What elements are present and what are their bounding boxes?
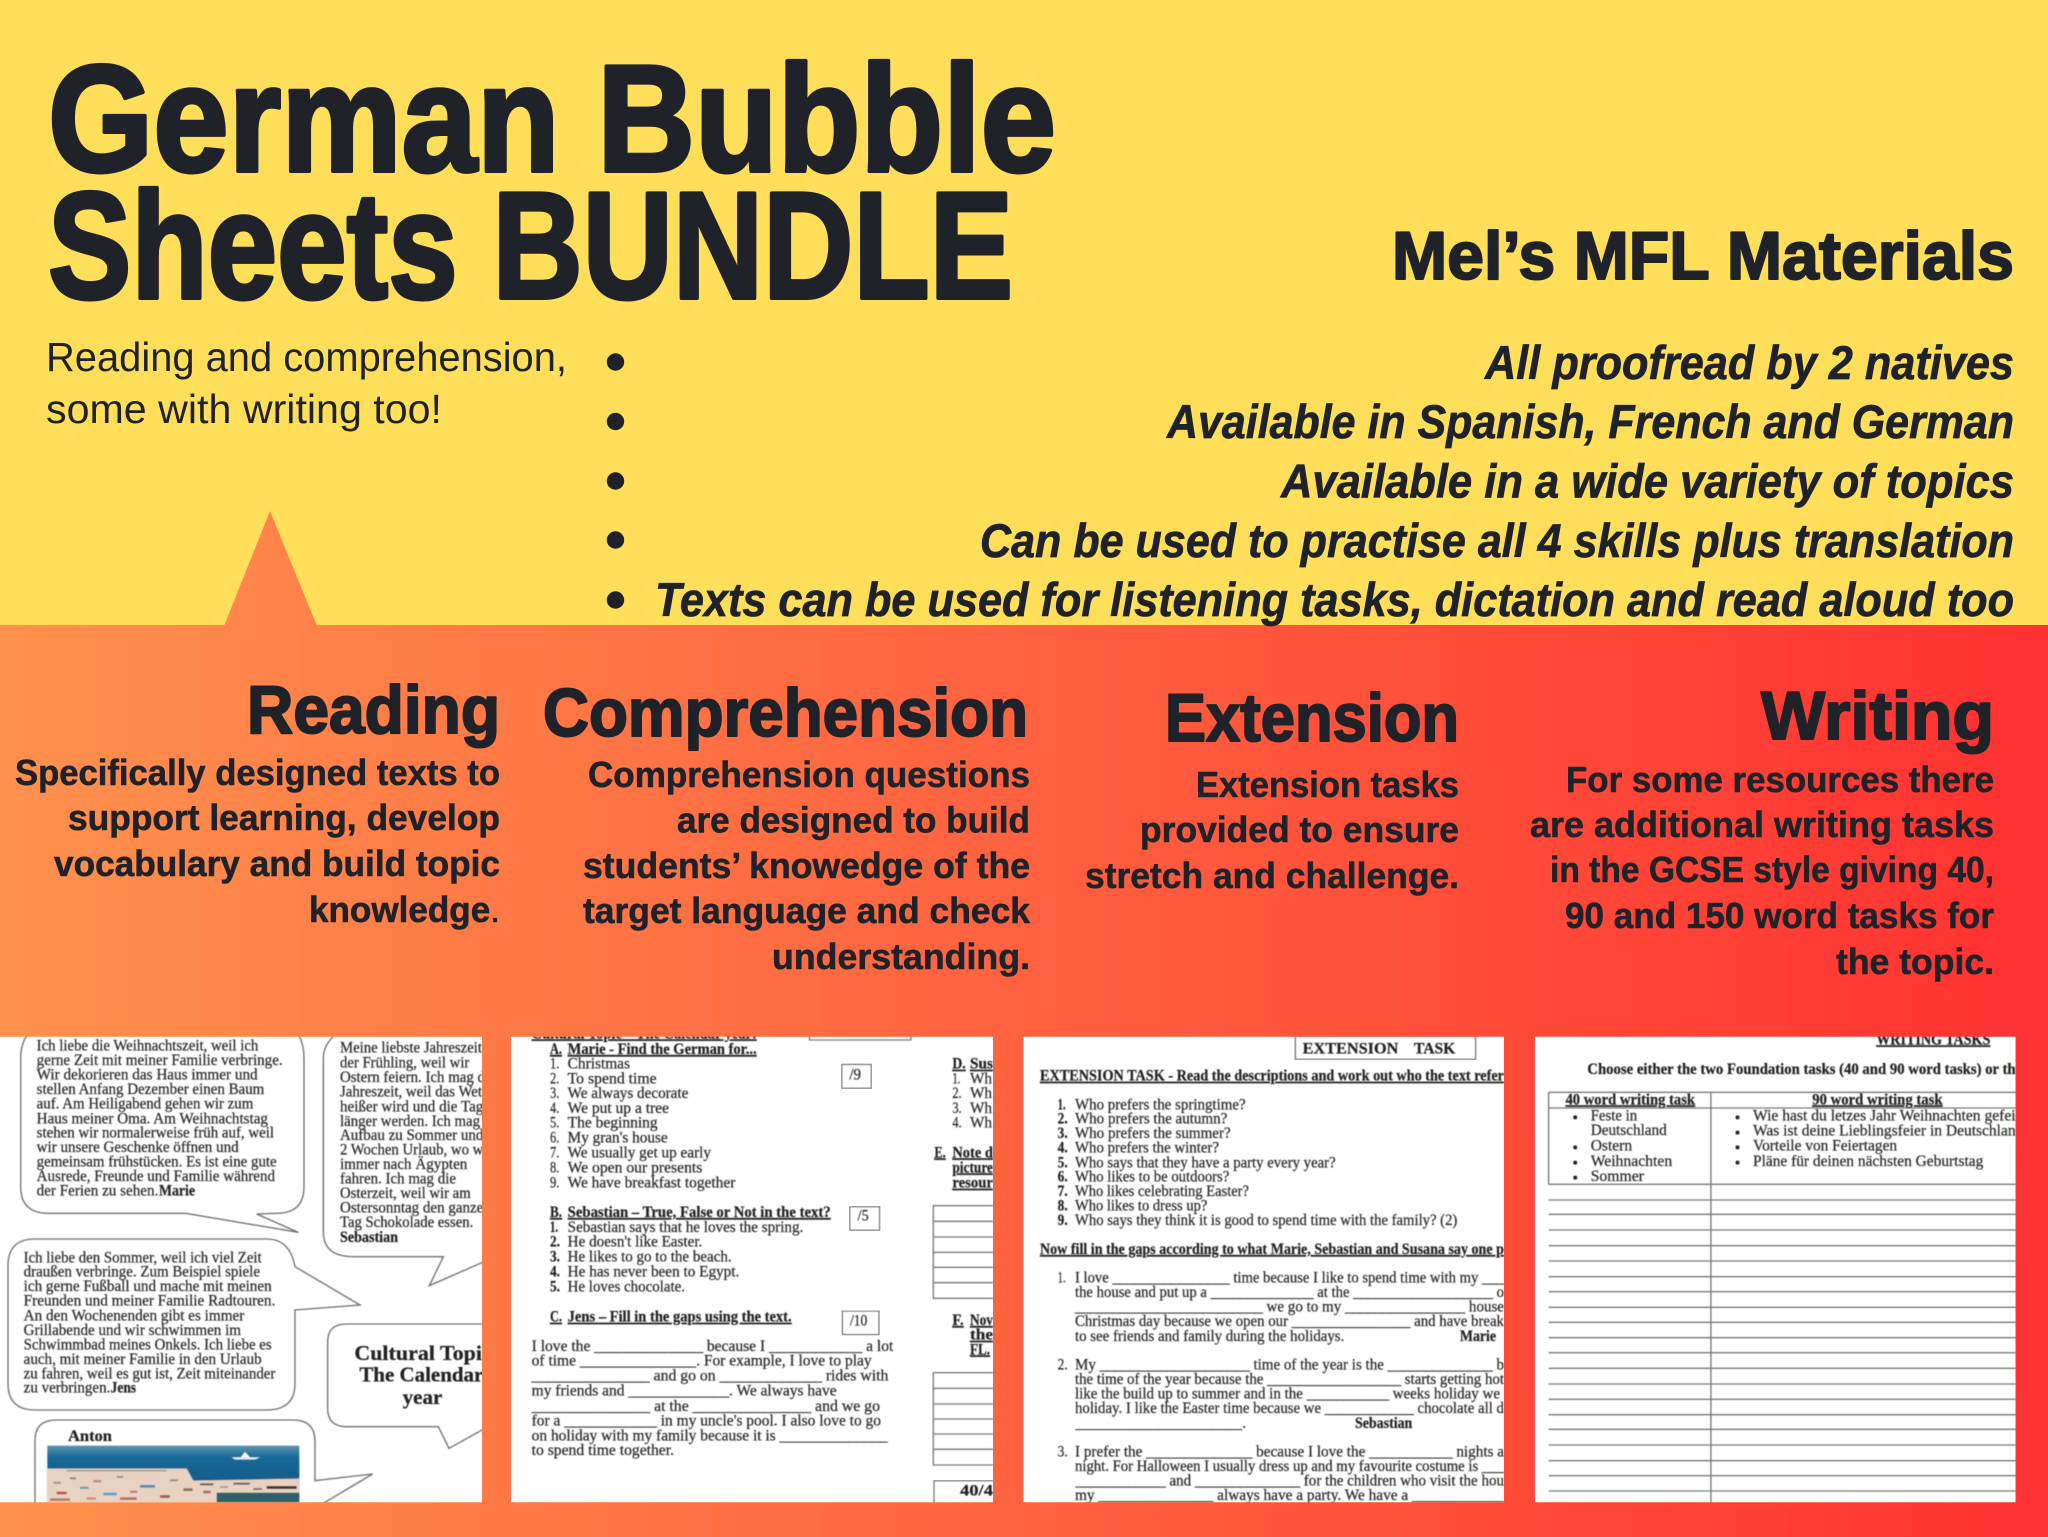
column: writing: are additional writing tasks [1530, 804, 1994, 845]
speech bubble: Jens: zu fahren, weil es gut ist, Zeit miteinander [24, 1365, 276, 1382]
fill in the gaps: the house and put up a ______________ at the ___________________ o [1075, 1284, 1504, 1301]
column: reading: vocabulary and build topic [54, 843, 500, 884]
speech bubble: Marie: gerne Zeit mit meiner Familie verbringe. [37, 1052, 283, 1069]
speech bubble: topic title: Cultural Topi [354, 1343, 482, 1365]
score box 40/40: 40/4 [960, 1483, 993, 1500]
extension task box: EXTENSION [1303, 1040, 1399, 1057]
90 word task bullets: Vorteile von Feiertagen [1753, 1138, 1897, 1155]
subtitle [46, 334, 567, 432]
section A: We have breakfast together [568, 1174, 736, 1191]
section B: 1. [550, 1219, 558, 1236]
speech bubble: Anton with beach photo [35, 1420, 373, 1507]
panel: reading sheet preview [0, 1033, 485, 1507]
section D: 1. [952, 1070, 960, 1087]
speech bubble: topic title: The Calendar [359, 1365, 483, 1387]
column: extension: stretch and challenge. [1085, 855, 1459, 896]
column: comprehension [543, 675, 1031, 977]
fill in the gaps: the time of the year because the __________________ starts getting hot [1075, 1371, 1505, 1388]
section A: We open our presents [568, 1160, 702, 1177]
section F with answer table: FL. [970, 1341, 990, 1358]
section D: 2. [952, 1085, 962, 1102]
section D: Sus [970, 1056, 993, 1073]
section D: Wh [970, 1070, 992, 1087]
section C: _______________ at the _______________ and we go [531, 1398, 880, 1415]
section A: A. [550, 1041, 562, 1058]
question list: 4. [1058, 1140, 1068, 1157]
score box /5: /5 [858, 1207, 869, 1224]
panel: comprehension sheet preview [511, 1025, 993, 1503]
column: extension: provided to ensure [1140, 809, 1459, 850]
section A: We usually get up early [568, 1145, 711, 1162]
section B: He doesn't like Easter. [568, 1234, 702, 1251]
column: comprehension: Comprehension questions [588, 754, 1030, 795]
speech bubble: Marie: stehen wir normalerweise früh auf, weil [37, 1125, 275, 1142]
section B: Sebastian – True, False or Not in the text? [568, 1204, 831, 1221]
speech bubble: Jens: Grillabende und wir schwimmen im [24, 1322, 241, 1339]
speech bubble: Jens: zu verbringen. [24, 1380, 110, 1397]
title: Sheets BUNDLE [48, 161, 1013, 331]
speech bubble: Sebastian [323, 1035, 485, 1286]
question list: Who says they think it is good to spend time with the family? (2) [1075, 1212, 1457, 1229]
section A: 4. [550, 1100, 559, 1117]
writing tasks heading: Choose either the two Foundation tasks (40 and 90 word tasks) or th [1587, 1061, 2016, 1078]
section E with answer table: E. [934, 1144, 946, 1161]
extension task box: TASK [1414, 1040, 1456, 1057]
section A: To spend time [568, 1070, 657, 1087]
question list: 6. [1058, 1169, 1068, 1186]
section A: 8. [550, 1160, 559, 1177]
section E with answer table: picture [952, 1159, 993, 1176]
writing tasks heading: WRITING TASKS [1876, 1031, 1991, 1048]
column: comprehension: students’ knowedge of the [583, 845, 1030, 886]
question list: EXTENSION TASK - Read the descriptions and work out who the text refer [1040, 1068, 1504, 1085]
section A: We always decorate [568, 1085, 688, 1102]
writing tasks heading [1587, 1031, 2016, 1078]
section D [952, 1056, 993, 1132]
question list: Who says that they have a party every year? [1075, 1154, 1336, 1171]
40 word task bullets: Deutschland [1591, 1122, 1667, 1139]
40 word task bullets: Weihnachten [1591, 1153, 1672, 1170]
speech bubble: topic title [328, 1324, 483, 1448]
section C: of time _______________. For example, I love to play [532, 1353, 872, 1370]
score box /10: /10 [850, 1312, 867, 1329]
speech bubble: Marie: Haus meiner Oma. Am Weihnachtstag [37, 1110, 268, 1127]
fill in the gaps: ______________________. [1075, 1415, 1246, 1432]
question list: 7. [1058, 1183, 1068, 1200]
speech bubble: Sebastian: immer nach Ägypten [340, 1155, 467, 1173]
question list [1040, 1068, 1504, 1229]
question list: Who prefers the springtime? [1075, 1096, 1246, 1113]
speech bubble: Sebastian: Tag Schokolade essen. [340, 1214, 473, 1231]
section D: 4. [952, 1115, 962, 1132]
question list: 2. [1058, 1111, 1068, 1128]
sheet header: Cultural Topic – The Calendar year: [532, 1025, 757, 1042]
column: comprehension: Comprehension [543, 675, 1028, 751]
speech bubble: Anton with beach photo: Anton [68, 1428, 112, 1445]
40 word task bullets: Feste in [1591, 1108, 1637, 1125]
title [48, 34, 1056, 331]
40 word task bullets: Sommer [1591, 1168, 1645, 1185]
fill in the gaps: ____________ and ______________ for the children who visit the hou [1075, 1473, 1504, 1490]
section C: Jens – Fill in the gaps using the text. [568, 1309, 792, 1326]
40 word task bullets [1573, 1108, 1672, 1185]
speech bubble: Jens: auch, mit meiner Familie in den Urlaub [24, 1351, 262, 1368]
section A: 3. [550, 1085, 559, 1102]
speech bubble: Marie: Ausrede, Freunde und Familie während [37, 1168, 275, 1185]
column: writing: in the GCSE style giving 40, [1550, 849, 1994, 890]
section B: 2. [550, 1234, 560, 1251]
section F with answer table: Nov [970, 1312, 993, 1329]
column: writing [1530, 678, 1994, 982]
question list: Who prefers the summer? [1075, 1125, 1231, 1142]
fill in the gaps [1040, 1241, 1505, 1504]
question list: 8. [1058, 1197, 1068, 1214]
section F with answer table [933, 1312, 993, 1465]
speech bubble: Marie [21, 1033, 304, 1232]
question list: 3. [1058, 1125, 1068, 1142]
90 word task bullets: Wie hast du letzes Jahr Weihnachten gefei [1753, 1107, 2016, 1124]
section D: Wh [970, 1115, 992, 1132]
column: reading [15, 672, 500, 930]
question list: Who likes to be outdoors? [1075, 1169, 1229, 1186]
column: writing: For some resources there [1566, 759, 1994, 800]
question list: Who prefers the autumn? [1075, 1111, 1227, 1128]
section C: I love the ______________ because I ____________ a lot [532, 1338, 894, 1355]
column: writing: Writing [1761, 678, 1994, 754]
sheet header [530, 1036, 912, 1043]
speech bubble: Marie: Wir dekorieren das Haus immer und [37, 1066, 258, 1083]
speech bubble: Sebastian: Ostern feiern. Ich mag d [340, 1069, 485, 1086]
column: extension: Extension tasks [1196, 764, 1459, 805]
speech bubble: Marie: stellen Anfang Dezember einen Baum [37, 1081, 264, 1098]
section B: He likes to go to the beach. [568, 1248, 732, 1265]
section A [550, 1041, 757, 1191]
fill in the gaps: Marie [1460, 1328, 1496, 1345]
fill in the gaps: I love ________________ time because I like to spend time with my ___ [1075, 1270, 1504, 1287]
fill in the gaps: Christmas day because we open our ________________ and have break [1075, 1313, 1504, 1330]
section D: Wh [970, 1100, 992, 1117]
column: extension: Extension [1165, 680, 1459, 756]
section B: 3. [550, 1248, 560, 1265]
section A: My gran's house [568, 1129, 668, 1146]
fill in the gaps: I prefer the ______________ because I love the ___________ nights a [1075, 1444, 1504, 1461]
speech bubble: Jens: Schwimmbad meines Onkels. Ich liebe es [24, 1336, 272, 1353]
fill in the gaps: like the build up to summer and in the ___________ weeks holiday we [1075, 1385, 1500, 1402]
section F with answer table: F. [952, 1312, 964, 1329]
section B: 5. [550, 1279, 560, 1296]
fill in the gaps: Now fill in the gaps according to what Marie, Sebastian and Susana say one p [1040, 1241, 1504, 1258]
triangle pointer [224, 511, 317, 626]
section A: Christmas [568, 1056, 630, 1073]
speech bubble: Marie: auf. Am Heiligabend gehen wir zum [37, 1096, 253, 1113]
fill in the gaps: holiday. I like the Easter time because we ____________ chocolate all d [1075, 1400, 1504, 1417]
section C: on holiday with my family because it is ______________ [532, 1427, 888, 1444]
speech bubble: Jens: draußen verbringe. Zum Beispiel spiele [24, 1264, 260, 1281]
column: reading: knowledge. [309, 889, 500, 930]
question list: Who likes to dress up? [1075, 1197, 1207, 1214]
fill in the gaps: night. For Halloween I usually dress up and my favourite costume is ___ [1075, 1458, 1504, 1475]
question list: Who prefers the winter? [1075, 1140, 1219, 1157]
fill in the gaps: _________________________ we go to my ________________ house [1074, 1299, 1504, 1316]
speech bubble: Marie: Ich liebe die Weihnachtszeit, weil ich [37, 1038, 258, 1055]
speech bubble: Sebastian: 2 Wochen Urlaub, wo w [340, 1142, 484, 1159]
section E with answer table [933, 1144, 993, 1298]
fill in the gaps: 1. [1058, 1270, 1066, 1287]
section D: D. [952, 1056, 966, 1073]
section F with answer table: the [970, 1327, 993, 1344]
speech bubble: Marie: wir unsere Geschenke öffnen und [37, 1139, 239, 1156]
speech bubble: Sebastian: Osterzeit, weil wir am [340, 1185, 471, 1202]
speech bubble: Sebastian: der Frühling, weil wir [340, 1054, 470, 1071]
fill in the gaps: my _______________ always have a party. We have a ____________ [1075, 1487, 1504, 1504]
gradient band [0, 625, 2048, 1537]
section B [550, 1204, 831, 1296]
fill in the gaps: 3. [1058, 1444, 1068, 1461]
speech bubble: Sebastian: fahren. Ich mag die [340, 1170, 456, 1187]
column: writing: 90 and 150 word tasks for [1565, 895, 1994, 936]
speech bubble: Jens: ich gerne Fußball und mache mit meinen [24, 1278, 272, 1295]
speech bubble: topic title: year [403, 1387, 442, 1409]
section C: C. [550, 1309, 562, 1326]
column: reading: Specifically designed texts to [15, 752, 500, 793]
speech bubble: Sebastian: länger werden. Ich mag [340, 1113, 480, 1130]
speech bubble: Jens [8, 1239, 360, 1410]
section D: Wh [970, 1085, 992, 1102]
column: comprehension: target language and check [583, 890, 1031, 931]
40 word task bullets: Ostern [1591, 1138, 1632, 1155]
column: comprehension: understanding. [772, 936, 1030, 977]
fill in the gaps: 2. [1058, 1357, 1068, 1374]
column: comprehension: are designed to build [677, 800, 1030, 840]
question list: 1. [1058, 1096, 1066, 1113]
section A: 9. [550, 1174, 559, 1191]
speech bubble: Jens: Ich liebe den Sommer, weil ich viel Zeit [24, 1249, 262, 1266]
speech bubble: Marie: Marie [159, 1182, 195, 1199]
column: reading: support learning, develop [68, 797, 500, 838]
panel: writing sheet preview [1535, 1031, 2018, 1503]
fill in the gaps: My ____________________ time of the year is the ______________ b [1075, 1357, 1504, 1374]
score box /10 [842, 1311, 879, 1335]
question list: Who likes celebrating Easter? [1075, 1183, 1249, 1200]
section A: 2. [550, 1070, 559, 1087]
section B: He has never been to Egypt. [568, 1263, 739, 1280]
writing task table: 90 word writing task [1812, 1091, 1943, 1108]
writing task table [1549, 1091, 2018, 1503]
speech bubble: Marie: der Ferien zu sehen. [37, 1182, 158, 1199]
section D: 3. [952, 1100, 962, 1117]
section E with answer table: Note d [952, 1144, 993, 1161]
section C [531, 1309, 894, 1459]
section A: The beginning [568, 1115, 658, 1132]
section B: B. [550, 1204, 562, 1221]
question list: 5. [1058, 1154, 1068, 1171]
section C: to spend time together. [532, 1442, 674, 1459]
section A: 5. [550, 1115, 559, 1132]
section C: _______________ and go on _____________ rides with [531, 1368, 889, 1385]
90 word task bullets: Was ist deine Lieblingsfeier in Deutschlan [1753, 1123, 2016, 1140]
score box 40/40 [934, 1481, 993, 1503]
speech bubble: Sebastian: Jahreszeit, weil das Wet [340, 1084, 483, 1101]
fill in the gaps: Sebastian [1355, 1415, 1413, 1432]
column: extension [1085, 680, 1459, 896]
90 word task bullets: Pläne für deinen nächsten Geburtstag [1753, 1153, 1983, 1170]
speech bubble: Jens: Freunden und meiner Familie Radtouren. [24, 1293, 275, 1310]
writing task table: 40 word writing task [1565, 1091, 1695, 1108]
section A: 7. [550, 1145, 559, 1162]
section C: my friends and _____________. We always have [532, 1383, 837, 1400]
speech bubble: Sebastian: Aufbau zu Sommer und [340, 1127, 483, 1144]
speech bubble: Marie: gemeinsam frühstücken. Es ist eine gute [37, 1154, 277, 1171]
title: German Bubble [48, 34, 1056, 204]
90 word task bullets [1735, 1107, 2016, 1170]
section A: 6. [550, 1129, 559, 1146]
section A: Marie - Find the German for... [568, 1041, 757, 1058]
speech bubble: Sebastian: Ostersonntag den ganze [340, 1200, 483, 1217]
subtitle: Reading and comprehension, [46, 334, 567, 380]
subtitle: some with writing too! [46, 386, 442, 432]
speech bubble: Jens: An den Wochenenden gibt es immer [24, 1308, 245, 1325]
speech bubble: Sebastian: heißer wird und die Tag [340, 1098, 483, 1115]
feature bullet list: All proofread by 2 natives [1484, 336, 2014, 389]
section A: We put up a tree [568, 1100, 669, 1117]
speech bubble: Sebastian: Meine liebste Jahreszeit [340, 1040, 483, 1057]
beach photo [47, 1446, 299, 1502]
section B: Sebastian says that he loves the spring. [568, 1219, 803, 1236]
extension task box [1295, 1036, 1476, 1059]
question list: 9. [1058, 1212, 1068, 1229]
column: reading: Reading [247, 672, 500, 748]
section E with answer table: resour [952, 1175, 993, 1192]
fill in the gaps: to see friends and family during the holidays. [1075, 1328, 1344, 1345]
speech bubble: Jens: Jens [111, 1380, 136, 1397]
section A: 1. [550, 1056, 559, 1073]
speech bubble: Sebastian: Sebastian [340, 1229, 398, 1246]
section B: He loves chocolate. [568, 1279, 685, 1296]
brand name: Mel’s MFL Materials [1392, 218, 2014, 294]
score box /5 [850, 1207, 880, 1230]
section B: 4. [550, 1263, 560, 1280]
feature bullet list [607, 336, 2014, 626]
panel: extension sheet preview [1023, 1036, 1505, 1504]
score box /9: /9 [849, 1066, 861, 1083]
section C: for a ____________ in my uncle's pool. I also love to go [532, 1413, 881, 1430]
score box /9 [842, 1064, 871, 1088]
column: writing: the topic. [1836, 941, 1994, 982]
